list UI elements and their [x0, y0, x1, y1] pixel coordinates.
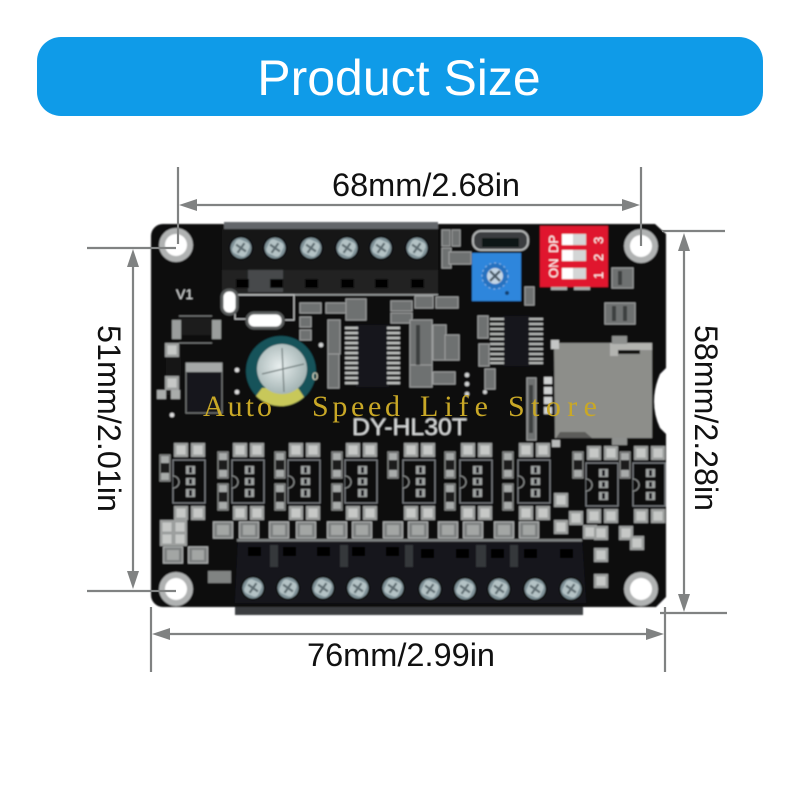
- main chip: [345, 325, 400, 387]
- dimension: right 58mm: 58mm/2.28in: [688, 325, 724, 511]
- store watermark: Auto: [203, 390, 272, 423]
- store watermark: Life: [420, 390, 488, 423]
- SD card slot: [551, 336, 652, 447]
- store watermark: Store: [508, 390, 597, 423]
- red DIP switch: DP: [546, 235, 561, 253]
- circuit board photo: [151, 222, 666, 615]
- board model text: DY-HL30T: [352, 414, 467, 441]
- dimension: bottom 76mm: 76mm/2.99in: [307, 637, 495, 673]
- driver modules row: [160, 443, 665, 588]
- capacitor: 0: [312, 371, 318, 383]
- bottom screw terminal: [235, 539, 586, 615]
- voltage regulator: [157, 343, 239, 417]
- dimension: right 58mm: [660, 231, 727, 613]
- capacitor: [246, 336, 318, 406]
- slot traces: [222, 290, 294, 328]
- store watermark: Speed: [312, 390, 400, 423]
- red DIP switch: ON: [546, 258, 561, 278]
- blue potentiometer: [472, 253, 521, 301]
- red DIP switch: 2: [591, 254, 606, 261]
- red DIP switch: [540, 226, 608, 290]
- diode: [172, 316, 221, 343]
- dimension: top 68mm: [178, 167, 641, 246]
- title banner: [37, 37, 763, 116]
- micro USB connector: [473, 231, 528, 250]
- mounting holes: [159, 228, 658, 606]
- red DIP switch: 1: [591, 272, 606, 279]
- dimension: bottom 76mm: [151, 607, 665, 673]
- dimension: left 51mm: [87, 248, 176, 591]
- store watermark: [203, 390, 597, 423]
- second chip: [490, 316, 543, 366]
- top screw terminal: [222, 222, 438, 296]
- title text: Product Size: [257, 50, 541, 106]
- small components: [300, 230, 635, 440]
- dimension: top 68mm: 68mm/2.68in: [332, 167, 520, 203]
- V1 label: V1: [176, 286, 193, 302]
- red DIP switch: 3: [591, 237, 606, 244]
- board outline: [151, 224, 666, 607]
- dimension: left 51mm: 51mm/2.01in: [91, 325, 127, 512]
